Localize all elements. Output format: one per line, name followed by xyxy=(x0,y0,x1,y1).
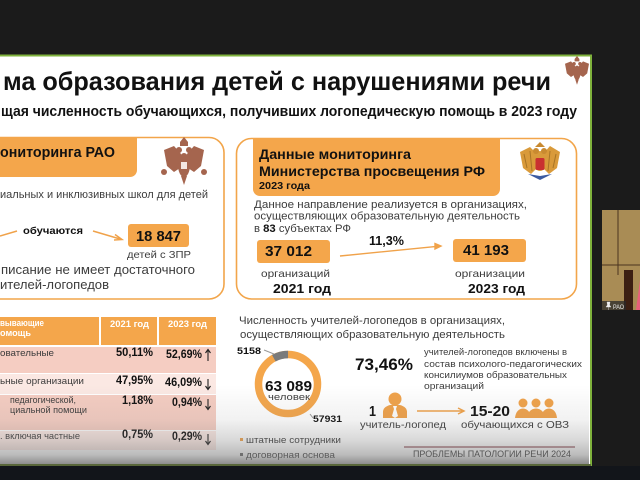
stat: students: 15-20 xyxy=(470,404,510,420)
text: 83 regions: осуществляющих образовательную деятельность xyxy=(254,210,520,222)
table row 1: 50,11% xyxy=(116,345,153,359)
stat: 41 193 xyxy=(453,239,526,262)
text: 83 regions: Данное направление реализуется в организациях, xyxy=(254,199,527,211)
stat: students xyxy=(461,404,569,431)
stat: 41 193: 41 193 xyxy=(463,243,509,259)
stat: 18 847: 18 847 xyxy=(136,229,181,245)
panel: ministry monitoring xyxy=(236,138,576,299)
stat: one teacher: учитель-логопед xyxy=(360,420,446,431)
label: study: обучаются xyxy=(23,225,83,237)
icon: teacher xyxy=(383,392,407,418)
slide background xyxy=(0,56,591,466)
table row 2: ьные организации xyxy=(0,376,84,387)
icon: ministry emblem xyxy=(520,142,560,180)
subtitle: щая численность обучающихся, получивших логопедическую помощь в 2023 году xyxy=(1,104,577,120)
table row 2: 46,09% xyxy=(165,375,202,389)
text: consilium note: консилиумов образовательных xyxy=(424,370,568,380)
panel header: 2023 года xyxy=(259,180,310,192)
arrow: to label xyxy=(0,231,17,236)
heading: speech therapist numbers xyxy=(239,315,505,341)
heading: speech therapist numbers: Численность учителей-логопедов в организациях, xyxy=(239,315,505,327)
panel header: ониторинга РАО xyxy=(0,145,115,161)
arrow: growth xyxy=(340,244,441,256)
table row 3 xyxy=(0,393,216,430)
table row 4 xyxy=(0,427,216,450)
panel header: Министерства просвещения РФ xyxy=(259,163,485,179)
table row 2: 47,95% xyxy=(116,373,153,387)
table row 4: 0,29% xyxy=(172,429,202,443)
text: staffing note: ителей-логопедов xyxy=(0,278,109,292)
donut chart: 57931 xyxy=(313,414,343,425)
panel header: Данные мониторинга xyxy=(259,146,411,162)
icon: group of students xyxy=(515,398,557,418)
table row 1 xyxy=(0,345,216,373)
donut chart: 63 089 xyxy=(265,379,312,395)
caption: 2023: организации xyxy=(455,268,525,280)
table row 3: 1,18% xyxy=(122,393,153,407)
text: 83 regions xyxy=(254,199,527,235)
stat: 37 012 xyxy=(257,240,330,263)
title: ма образования детей с нарушениями речи xyxy=(3,66,551,96)
text: consilium note: состав психолого-педагогических xyxy=(424,359,583,369)
table: share of organisations xyxy=(0,317,216,450)
icon: small eagle emblem top right xyxy=(565,56,589,85)
caption: 2021: организаций xyxy=(261,268,330,280)
table row 3: 0,94% xyxy=(172,395,202,409)
stat: 18 847 xyxy=(128,224,189,247)
panel header xyxy=(253,138,500,196)
text: schools: иальных и инклюзивных школ для детей xyxy=(0,189,208,201)
caption: 2023: 2023 год xyxy=(468,281,526,296)
caption: 2021: 2021 год xyxy=(273,281,332,296)
heading: speech therapist numbers: осуществляющих образовательную деятельность xyxy=(240,329,505,341)
table row 1: 52,69% xyxy=(166,347,202,361)
footer: ПРОБЛЕМЫ ПАТОЛОГИИ РЕЧИ 2024 xyxy=(413,449,571,460)
table row 3: педагогической, xyxy=(10,395,76,406)
panel header xyxy=(0,137,137,177)
table row 2 xyxy=(0,373,216,394)
text: staffing note xyxy=(0,263,195,292)
table header xyxy=(0,317,216,345)
donut chart: 5158 xyxy=(237,346,261,357)
stat: one teacher: 1 xyxy=(369,404,376,420)
webcam tile xyxy=(602,210,640,311)
text: staffing note: писание не имеет достаточного xyxy=(1,263,195,277)
table header: 2021 год xyxy=(110,319,149,330)
caption: children: детей с ЗПР xyxy=(127,249,191,261)
stat: students: обучающихся с ОВЗ xyxy=(461,419,569,431)
label: growth percent: 11,3% xyxy=(369,234,404,248)
donut chart: человек xyxy=(268,392,311,403)
legend: договорная основа xyxy=(246,450,336,461)
webcam tile: РАО xyxy=(613,304,624,311)
table row 1: овательные xyxy=(0,348,54,359)
stat: 73,46%: 73,46% xyxy=(355,356,413,374)
stat: 37 012: 37 012 xyxy=(265,244,312,260)
caption: 2023 xyxy=(455,268,526,296)
text: 83 regions: в 83 субъектах РФ xyxy=(254,223,351,235)
stat: one teacher xyxy=(360,404,446,431)
table row 3: циальной помощи xyxy=(10,405,87,416)
text: consilium note xyxy=(424,347,583,391)
text: consilium note: учителей-логопедов включены в xyxy=(424,347,567,357)
icon: eagle emblem xyxy=(161,137,207,185)
arrow: to 18 847 xyxy=(93,231,122,240)
caption: 2021 xyxy=(261,268,332,296)
legend: штатные сотрудники xyxy=(246,435,341,446)
table header: омощь xyxy=(0,328,31,339)
donut chart xyxy=(237,346,343,425)
text: consilium note: организаций xyxy=(424,381,484,391)
arrow: teacher to students xyxy=(417,408,464,414)
legend xyxy=(240,435,341,461)
table header: 2023 год xyxy=(168,319,207,330)
table header: вывающие xyxy=(0,318,44,329)
panel: RAO monitoring xyxy=(0,137,224,299)
table row 4: . включая частные xyxy=(0,431,80,442)
table row 4: 0,75% xyxy=(122,427,153,441)
